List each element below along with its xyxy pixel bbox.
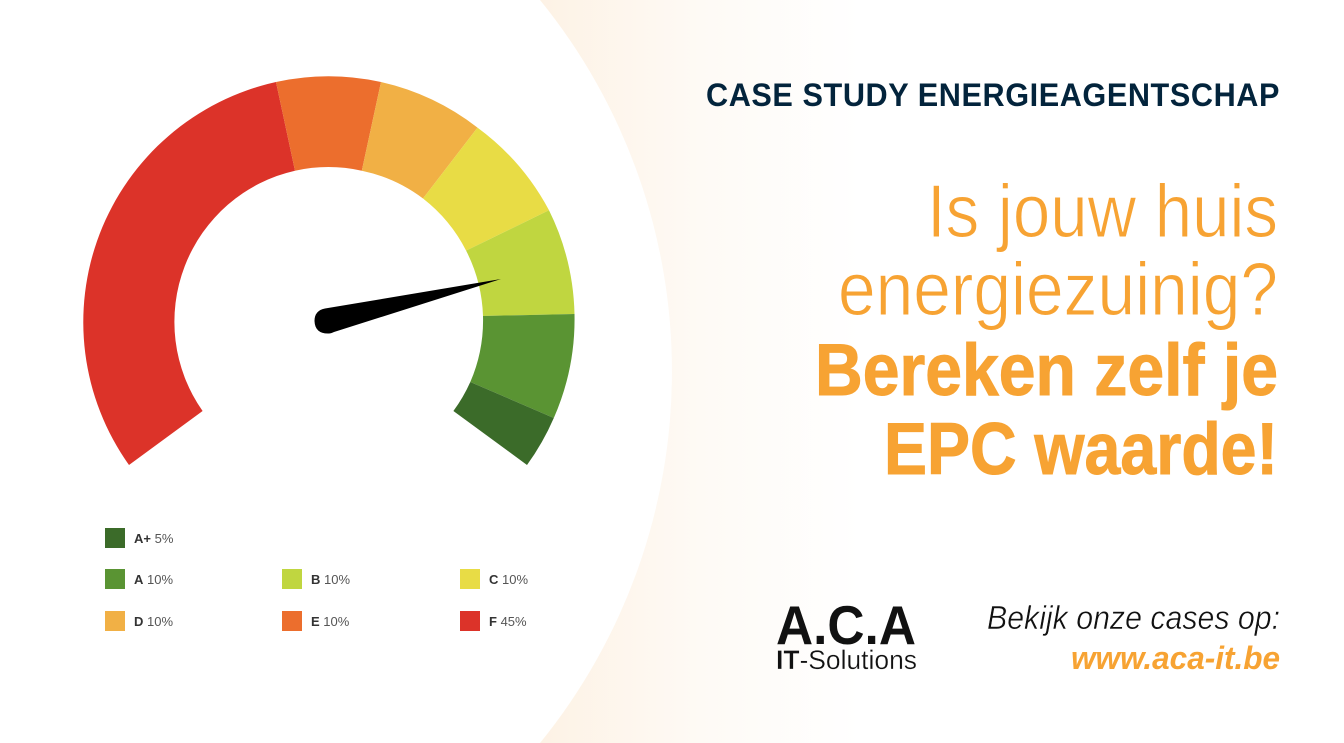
gauge segment: B 10% bbox=[466, 210, 574, 316]
website link: www.aca-it.be bbox=[1071, 640, 1280, 676]
logo tagline: IT-Solutions bbox=[776, 645, 917, 675]
legend item: A 10% bbox=[105, 569, 173, 589]
call to action bbox=[987, 599, 1280, 676]
legend item: F 45%: F 45% bbox=[489, 614, 527, 629]
headline line: EPC waarde!: EPC waarde! bbox=[884, 409, 1278, 490]
legend item: E 10% bbox=[282, 611, 350, 631]
gauge segment: A+ 5% bbox=[453, 382, 554, 465]
legend item: A 10%: A 10% bbox=[134, 572, 173, 587]
gauge segment: F 45% bbox=[83, 82, 295, 465]
gauge needle bbox=[314, 279, 501, 334]
legend item: C 10%: C 10% bbox=[489, 572, 528, 587]
legend item: A+ 5%: A+ 5% bbox=[134, 531, 174, 546]
legend item: C 10% bbox=[460, 569, 528, 589]
legend item: A+ 5% bbox=[105, 528, 174, 548]
call to action text: Bekijk onze cases op: bbox=[987, 599, 1280, 636]
background: white circle panel bbox=[0, 0, 672, 743]
legend item: F 45% bbox=[460, 611, 527, 631]
heading: case study label: CASE STUDY ENERGIEAGENTSCHAP bbox=[706, 77, 1280, 113]
headline line: Bereken zelf je: Bereken zelf je bbox=[815, 330, 1278, 411]
gauge segment: A 10% bbox=[470, 314, 575, 418]
headline line: energiezuinig?: energiezuinig? bbox=[838, 247, 1278, 331]
legend bbox=[105, 528, 528, 631]
legend item: E 10%: E 10% bbox=[311, 614, 350, 629]
gauge segment: E 10% bbox=[276, 76, 381, 171]
headline line: Is jouw huis: Is jouw huis bbox=[927, 169, 1278, 253]
gauge segment: C 10% bbox=[423, 128, 549, 251]
legend item: D 10%: D 10% bbox=[134, 614, 173, 629]
legend item: B 10%: B 10% bbox=[311, 572, 350, 587]
legend item: D 10% bbox=[105, 611, 173, 631]
legend item: B 10% bbox=[282, 569, 350, 589]
logo: A.C.A IT-Solutions bbox=[776, 594, 917, 675]
gauge chart bbox=[83, 76, 575, 465]
logo wordmark: A.C.A bbox=[776, 594, 916, 656]
gauge segment: D 10% bbox=[362, 82, 478, 198]
headline bbox=[815, 169, 1278, 490]
